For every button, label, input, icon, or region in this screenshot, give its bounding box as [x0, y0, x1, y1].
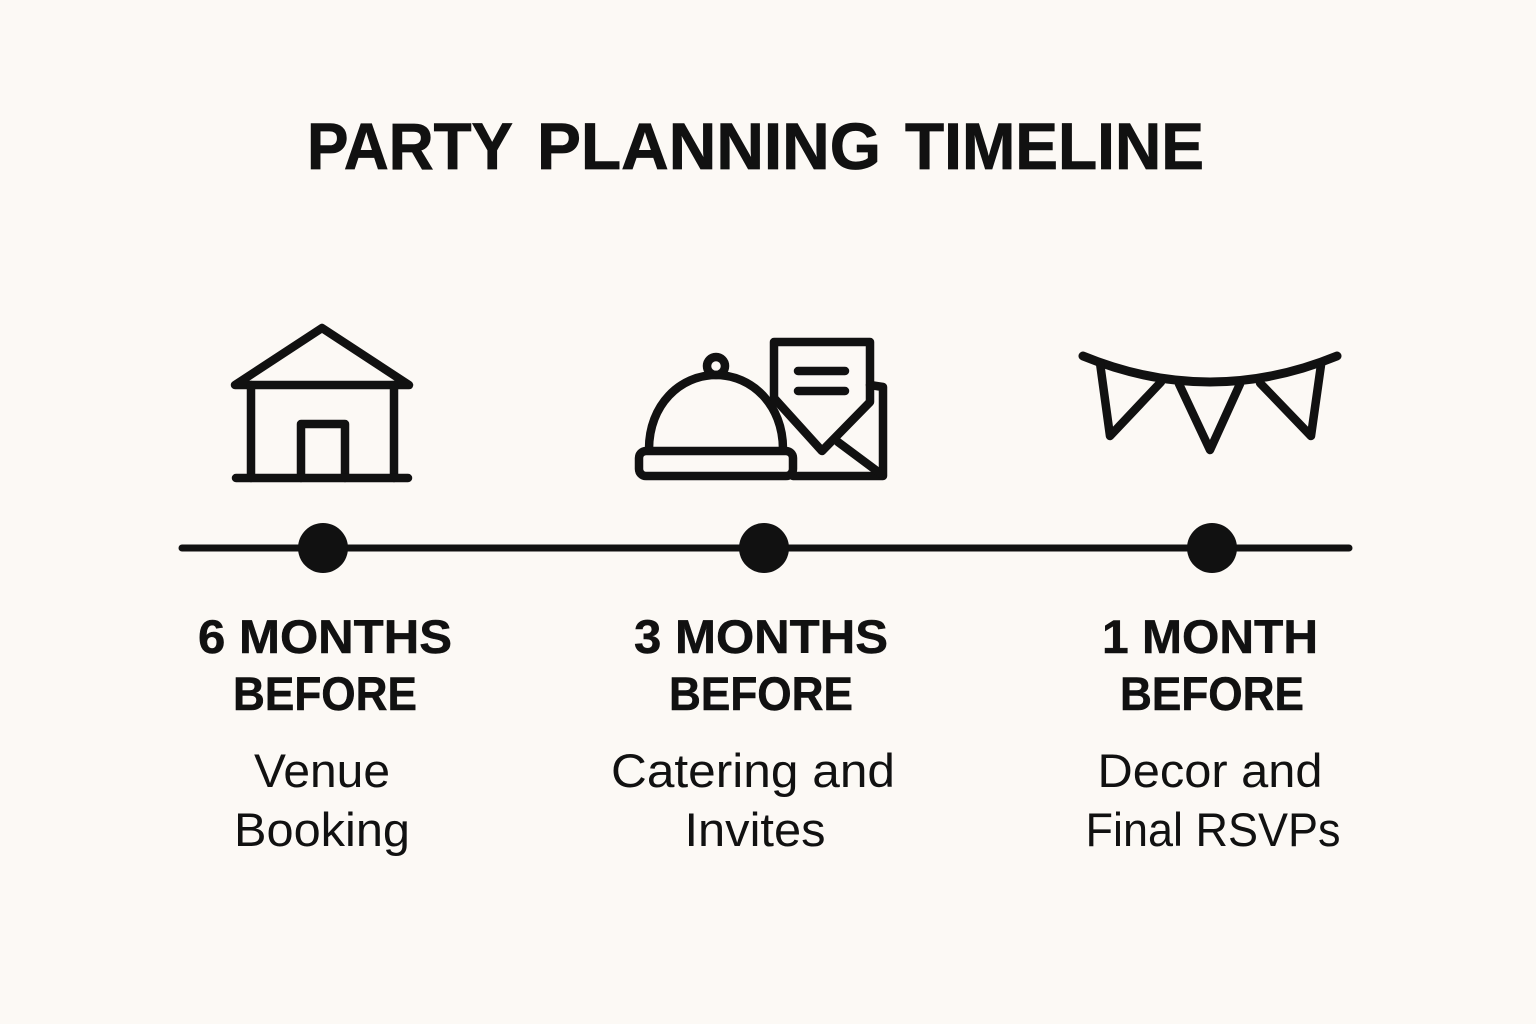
milestone: 1 month before: Decor and: [1098, 744, 1322, 797]
icon: catering dome and invitation: [639, 342, 883, 476]
marker: 3 months: [739, 523, 789, 573]
milestone: 1 month before: Final RSVPs: [1086, 803, 1340, 856]
title: PLANNING: [537, 109, 881, 183]
title: TIMELINE: [905, 109, 1204, 183]
timeline axis: [182, 523, 1349, 573]
milestone: 6 months before: BEFORE: [233, 667, 417, 720]
marker: 1 month: [1187, 523, 1237, 573]
milestone: 6 months before: [198, 610, 452, 856]
milestone: 3 months before: [611, 610, 895, 856]
milestone: 1 month before: [1086, 610, 1340, 856]
milestone: 6 months before: Booking: [234, 803, 410, 856]
milestone: 3 months before: 3 MONTHS: [634, 610, 888, 663]
icon: house: [235, 328, 409, 478]
title: PARTY: [307, 109, 513, 183]
milestone: 1 month before: BEFORE: [1120, 667, 1304, 720]
title: [307, 109, 1204, 183]
milestone: 6 months before: Venue: [254, 744, 390, 797]
milestone: 6 months before: 6 MONTHS: [198, 610, 452, 663]
milestone: 3 months before: Invites: [684, 803, 826, 856]
milestone: 3 months before: BEFORE: [669, 667, 853, 720]
icon: bunting: [1083, 356, 1337, 450]
milestone: 1 month before: 1 MONTH: [1102, 610, 1318, 663]
milestone: 3 months before: Catering and: [611, 744, 895, 797]
marker: 6 months: [298, 523, 348, 573]
